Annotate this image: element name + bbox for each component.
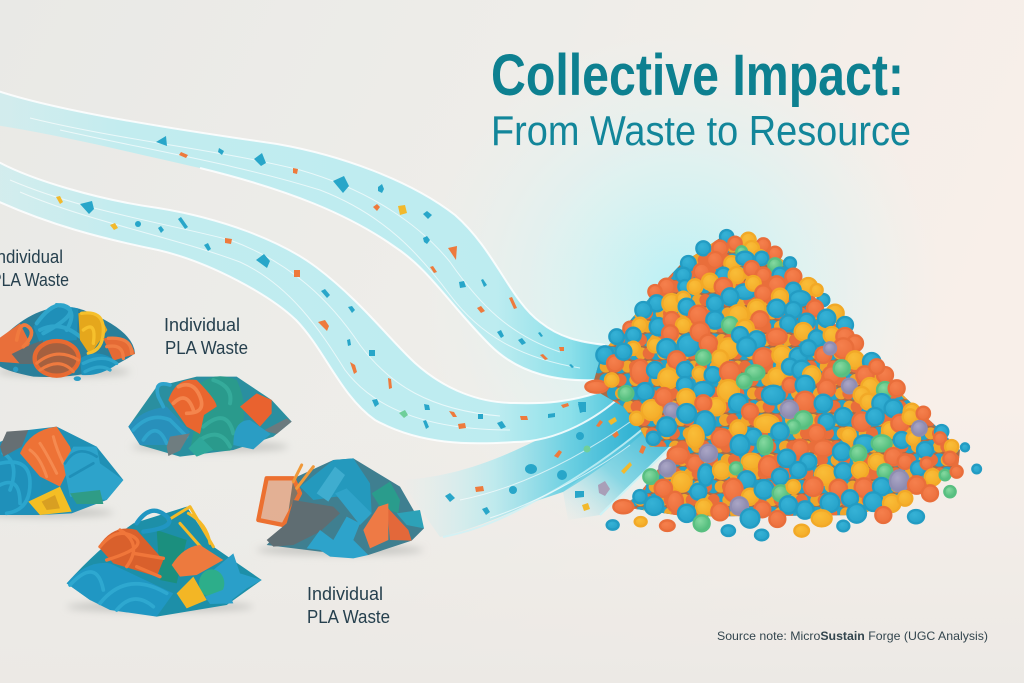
label: individual PLA waste, left (clipped) xyxy=(0,247,69,290)
waste pile C: tangled filament xyxy=(0,427,123,517)
flow stream: middle band xyxy=(0,160,620,443)
title: From Waste to Resource xyxy=(491,107,911,154)
particles carried in lower fan xyxy=(445,404,646,515)
waste pile A: tangled filament xyxy=(0,305,135,381)
pile body filled with tightly packed colour xyxy=(587,230,967,520)
pellets xyxy=(585,230,981,540)
label: individual PLA waste, centre: PLA Waste xyxy=(165,338,248,358)
source note: Source note: MicroSustain Forge (UGC Analysis) xyxy=(717,629,988,643)
pellet pile xyxy=(585,230,981,540)
particles carried in upper band xyxy=(156,136,574,368)
title xyxy=(491,43,911,154)
label: individual PLA waste, centre xyxy=(164,315,248,358)
waste pile D: tangled filament with chunks xyxy=(67,507,262,617)
particles carried in middle band xyxy=(56,196,586,429)
label: individual PLA waste, bottom: Individual xyxy=(307,584,383,604)
label: individual PLA waste, centre: Individual xyxy=(164,315,240,335)
label: individual PLA waste, bottom xyxy=(307,584,390,627)
waste pile E: chunky fragments xyxy=(257,458,424,558)
flow stream: upper band xyxy=(0,90,605,380)
waste pile B: mixed filament and fragments xyxy=(128,376,292,457)
title: Collective Impact: xyxy=(491,43,904,108)
label: individual PLA waste, bottom: PLA Waste xyxy=(307,607,390,627)
waste piles drawn in 3x local coordinates xyxy=(0,305,424,617)
flow stream: lower fan entering the pile xyxy=(400,392,695,537)
